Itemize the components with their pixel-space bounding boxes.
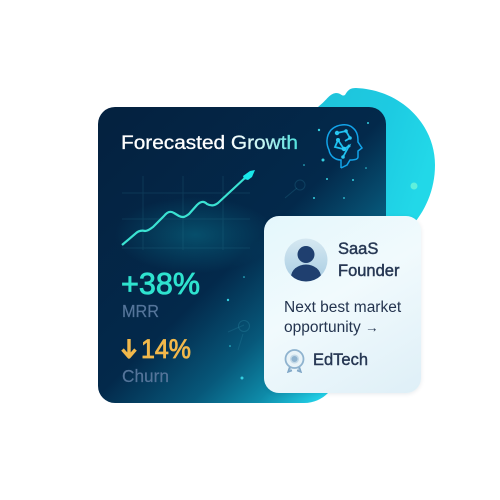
- teal background blob: [318, 88, 435, 230]
- graphic: growth card: [98, 88, 435, 403]
- title: Forecasted Growth: [121, 132, 298, 154]
- line chart: [122, 170, 255, 245]
- metric: churn value: 14%: [141, 334, 191, 364]
- panel: founder card: [264, 216, 421, 393]
- icon: award badge: [284, 349, 304, 373]
- sparkle dots: [227, 122, 369, 380]
- dark card panel: [98, 107, 386, 403]
- prompt text: opportunity →: [284, 319, 378, 336]
- avatar: [284, 238, 328, 282]
- market name: EdTech: [313, 351, 368, 369]
- prompt text: Next best market: [284, 299, 401, 316]
- metric: MRR value: +38%: [121, 266, 200, 301]
- blob dot: [410, 182, 418, 190]
- role label: SaaS: [338, 240, 378, 258]
- metric: MRR label: MRR: [122, 301, 159, 321]
- metric: churn label: Churn: [122, 366, 169, 386]
- role label: [338, 240, 400, 280]
- icon: AI brain head: [327, 125, 362, 168]
- icon: down arrow: [122, 339, 136, 357]
- prompt text: [284, 299, 402, 336]
- role label: Founder: [338, 262, 399, 280]
